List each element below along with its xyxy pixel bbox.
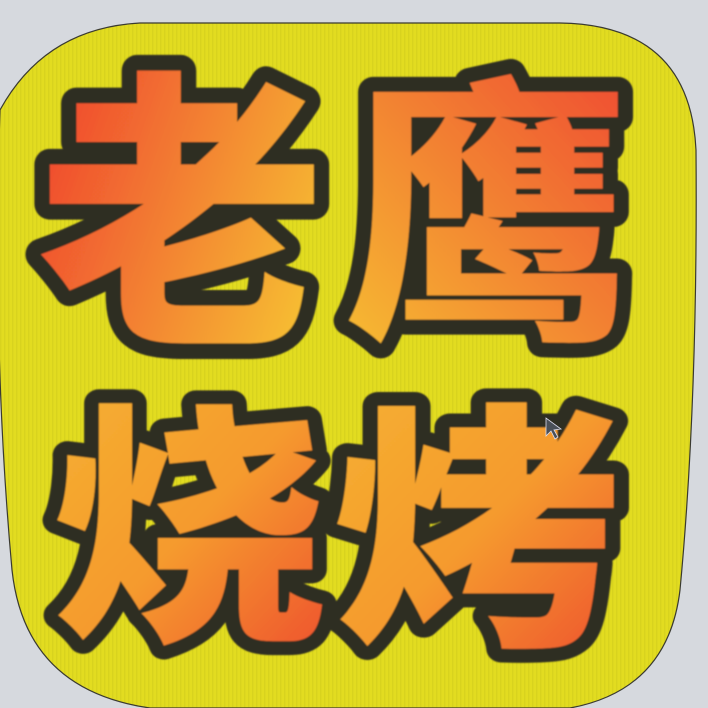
character: 老: 老 [38, 57, 325, 382]
character: 鹰: 鹰 [344, 63, 629, 375]
title: 老鹰烧烤 [38, 57, 629, 680]
character: 烤: 烤 [332, 390, 620, 680]
character: 烧: 烧 [52, 386, 326, 676]
character: 鹰: 鹰 [344, 63, 629, 375]
character: 烤: 烤 [332, 390, 620, 680]
character: 烧: 烧 [52, 386, 326, 676]
character: 老: 老 [38, 57, 325, 382]
icon: mouse cursor [546, 418, 561, 439]
